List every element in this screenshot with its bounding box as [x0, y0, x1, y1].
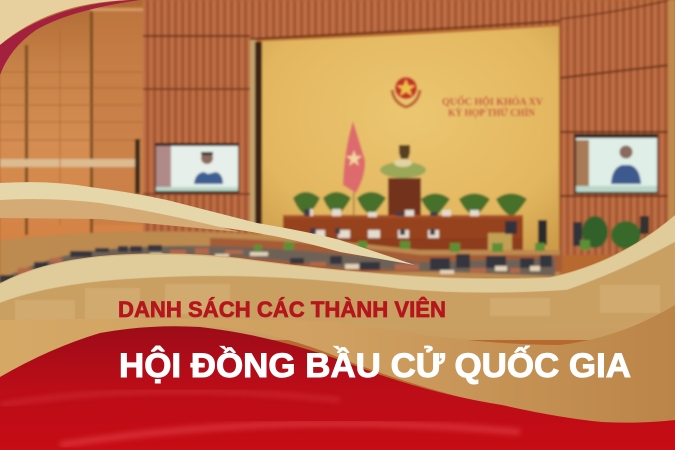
wall lettering: KỲ HỌP THỨ CHÍN	[448, 107, 536, 119]
gold wave under subtitle	[0, 305, 675, 425]
bust and podium with flowers	[380, 145, 426, 216]
floor, delegates, cameramen and plants	[0, 216, 649, 285]
right screen	[574, 134, 658, 194]
flag	[343, 121, 365, 216]
wall lettering: QUỐC HỘI KHÓA XV	[442, 95, 543, 108]
upper cream wave	[0, 182, 415, 265]
main title: HỘI ĐỒNG BẦU CỬ QUỐC GIA	[119, 346, 631, 385]
subtitle: DANH SÁCH CÁC THÀNH VIÊN	[118, 297, 446, 322]
photo: assembly hall	[0, 0, 675, 285]
striped wood panels	[143, 0, 675, 255]
left wood wall	[0, 0, 143, 240]
lower tan wave with hall reflection	[0, 215, 675, 340]
national emblem	[392, 77, 420, 107]
gold back wall	[262, 26, 559, 250]
reflection panels on gold	[0, 242, 675, 330]
wall lettering	[442, 95, 543, 119]
corner ribbon: cream and maroon	[0, 0, 140, 75]
left screen	[155, 143, 239, 193]
presidium tables	[283, 209, 523, 255]
palm plants	[293, 192, 527, 215]
red ribbon	[0, 326, 675, 450]
